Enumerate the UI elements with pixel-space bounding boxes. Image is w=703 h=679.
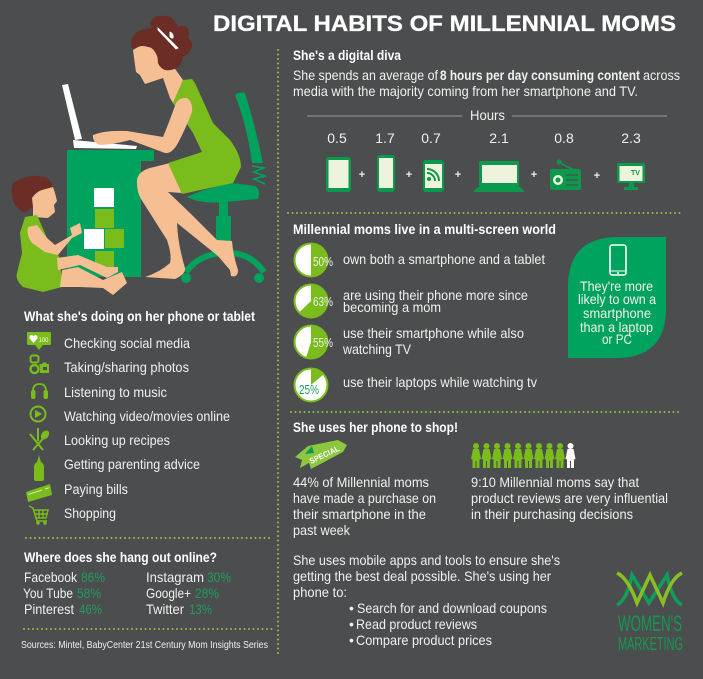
title: DIGITAL HABITS OF MILLENNIAL MOMS <box>213 11 676 36</box>
mother dress <box>168 79 241 194</box>
icon: special ribbon <box>295 440 347 469</box>
text block: apps and tools: She uses mobile apps and tools to ensure she's <box>293 552 560 568</box>
icon: radio <box>550 160 581 190</box>
illustration: mother with laptop and child <box>12 16 265 295</box>
text block: apps and tools: getting the best deal possible. She's using her <box>293 568 551 584</box>
icon: credit card <box>26 484 52 502</box>
heading: She's a digital diva <box>293 47 401 63</box>
hours values: 2.3 <box>621 130 641 146</box>
stat: using phone more: becoming a mom <box>343 299 441 315</box>
intro text <box>293 67 680 99</box>
list text: Listening to music <box>64 384 167 400</box>
stat: reviews: in their purchasing decisions <box>471 506 633 522</box>
callout: likely to own a <box>578 291 656 307</box>
panel: where she hangs out online <box>23 549 231 617</box>
stat: own both: own both a smartphone and a tablet <box>343 251 545 267</box>
icon: smartphone <box>377 155 395 192</box>
stat: purchase: past week <box>293 522 351 538</box>
stat: using phone more <box>343 287 528 315</box>
callout: or PC <box>602 331 632 347</box>
mother neck and face <box>133 40 183 103</box>
bullet list: • <box>349 632 354 648</box>
stats column one <box>23 569 105 617</box>
child hair <box>12 176 53 213</box>
bullet list: • <box>349 616 354 632</box>
icon: tablet <box>326 157 351 192</box>
hours values <box>327 130 641 146</box>
stat: purchase: have made a purchase on <box>293 490 436 506</box>
stat: using phone more: are using their phone more since <box>343 287 528 303</box>
stats column one: 58% <box>77 585 101 601</box>
pie: 55 percent <box>294 325 333 358</box>
panel: phone or tablet activities <box>24 308 255 524</box>
pie: 50 percent: 50% <box>313 255 333 269</box>
plus signs: + <box>359 169 365 181</box>
logo: womens marketing <box>617 573 683 654</box>
child face <box>32 187 57 218</box>
hours values: 2.1 <box>489 130 509 146</box>
list text: Shopping <box>64 505 116 521</box>
icon: laptop <box>473 161 525 192</box>
stat: reviews: product reviews are very influential <box>471 490 668 506</box>
plus signs <box>359 169 600 182</box>
callout: than a laptop <box>580 319 653 335</box>
list text: Watching video/movies online <box>64 408 230 424</box>
stats column two: Instagram <box>146 569 204 585</box>
stats column one: You Tube <box>23 585 73 601</box>
icon: social like: 100 <box>38 338 49 344</box>
text block: apps and tools <box>293 552 560 600</box>
plus signs: + <box>455 169 461 181</box>
stats column two: Google+ <box>146 585 191 601</box>
panel: shop by phone <box>293 419 683 654</box>
stat: purchase <box>293 474 436 538</box>
stats column two: 13% <box>189 601 212 617</box>
hours values: 0.5 <box>327 130 347 146</box>
icon: special ribbon: SPECIAL <box>308 444 341 466</box>
toy blocks <box>84 188 124 268</box>
hours values: 0.8 <box>554 130 574 146</box>
icon: camera <box>30 356 49 373</box>
desk <box>67 150 154 277</box>
icon: tv <box>617 163 645 190</box>
sources: Sources: Mintel, BabyCenter 21st Century Mom Insights Series <box>21 639 268 651</box>
icon: baby bottle <box>34 455 44 481</box>
callout <box>568 237 666 358</box>
stats column one: 86% <box>81 569 105 585</box>
stat: smartphone while tv <box>342 325 524 357</box>
hair clip <box>158 28 178 49</box>
stat: reviews <box>471 474 668 522</box>
icon: utensils <box>30 428 49 450</box>
stat: smartphone while tv: use their smartphone while also <box>343 325 524 341</box>
stats column one: Pinterest <box>24 601 74 617</box>
bullet list: • <box>349 600 354 616</box>
icon: phone with rss <box>423 160 444 192</box>
heading: What she's doing on her phone or tablet <box>24 308 255 324</box>
intro text: 8 hours per day consuming content <box>440 67 640 83</box>
hours values: 0.7 <box>421 130 441 146</box>
bullet list: Read product reviews <box>356 616 477 632</box>
pie: 50 percent <box>294 244 333 276</box>
plus signs: + <box>406 169 412 181</box>
pie: 25 percent <box>294 368 328 402</box>
intro text: across <box>643 67 680 83</box>
mother hair <box>131 16 192 70</box>
panel: multi-screen world <box>293 221 666 402</box>
stat: purchase: 44% of Millennial moms <box>293 474 429 490</box>
panel: digital diva <box>293 47 680 192</box>
laptop <box>62 84 137 149</box>
list text: Taking/sharing photos <box>64 359 189 375</box>
icon: phone outline <box>610 245 626 275</box>
child outfit <box>17 215 62 292</box>
plus signs: + <box>594 170 600 182</box>
pie: 55 percent: 55% <box>313 336 333 350</box>
stat: reviews: 9:10 Millennial moms say that <box>471 474 639 490</box>
stats column two: Twitter <box>146 601 184 617</box>
stat: purchase: their smartphone in the <box>293 506 426 522</box>
text block: apps and tools: phone to: <box>293 584 347 600</box>
hours axis label: Hours <box>470 107 505 123</box>
mother arm <box>93 98 192 153</box>
office chair <box>181 92 265 283</box>
pie: 63 percent <box>294 284 333 318</box>
icon row: ten women <box>471 443 576 468</box>
stats column one: Facebook <box>24 569 78 585</box>
callout: They're more <box>580 278 653 294</box>
heading: She uses her phone to shop! <box>293 419 458 435</box>
stats column two: 28% <box>195 585 219 601</box>
intro text: She spends an average of <box>293 67 438 83</box>
stats column one: 46% <box>79 601 102 617</box>
stats column two: 30% <box>207 569 231 585</box>
intro text: media with the majority coming from her smartphone and TV. <box>293 83 638 99</box>
callout: smartphone <box>583 305 651 321</box>
icon: shopping cart <box>29 506 48 524</box>
bullet list <box>349 600 547 648</box>
icon: headphones <box>31 384 48 399</box>
heading: Millennial moms live in a multi-screen world <box>293 221 556 237</box>
stat: smartphone while tv: watching TV <box>342 341 412 357</box>
icon: play button <box>30 406 46 422</box>
stats column two <box>146 569 231 617</box>
list text: Looking up recipes <box>64 432 170 448</box>
list text <box>64 335 230 521</box>
child limbs <box>28 223 127 295</box>
pie: 25 percent: 25% <box>299 383 319 397</box>
stat: laptops while tv: use their laptops while watching tv <box>343 374 537 390</box>
bullet list: Compare product prices <box>356 632 492 648</box>
hours values: 1.7 <box>375 130 395 146</box>
list text: Checking social media <box>64 335 190 351</box>
list text: Paying bills <box>64 481 128 497</box>
icon: social like <box>27 332 51 350</box>
bullet list: Search for and download coupons <box>357 600 547 616</box>
icon: tv: TV <box>631 170 640 177</box>
pie: 63 percent: 63% <box>313 295 333 309</box>
mother legs <box>137 163 238 279</box>
heading: Where does she hang out online? <box>24 549 217 565</box>
plus signs: + <box>531 169 537 181</box>
list text: Getting parenting advice <box>64 456 200 472</box>
